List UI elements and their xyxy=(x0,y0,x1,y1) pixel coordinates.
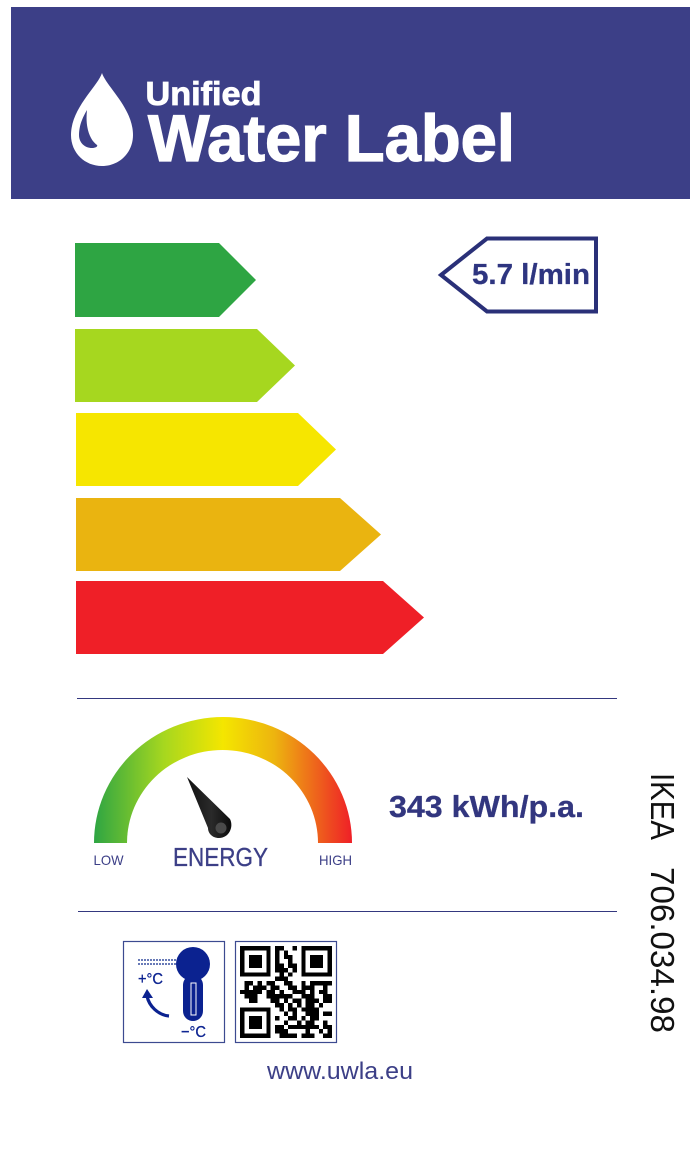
arrow: lime xyxy=(75,329,295,402)
icon: thermostat temperature: +°C xyxy=(138,971,163,988)
label: energy: ENERGY xyxy=(173,842,268,872)
arrow: green xyxy=(75,243,256,317)
icon: water drop xyxy=(71,73,133,166)
gauge arc xyxy=(94,717,352,843)
arrow: red xyxy=(76,581,424,654)
QR code xyxy=(236,942,336,1042)
energy consumption value: 343 kWh/p.a. xyxy=(389,789,584,824)
label: high: HIGH xyxy=(319,852,352,868)
website url: www.uwla.eu xyxy=(266,1058,413,1085)
icon: thermostat temperature: −°C xyxy=(181,1024,206,1041)
title: Unified: Unified xyxy=(146,75,262,112)
arrow: yellow xyxy=(76,413,336,486)
icon: thermostat temperature xyxy=(124,942,224,1042)
energy gauge xyxy=(94,717,352,872)
flow rate flag xyxy=(441,238,596,312)
header banner xyxy=(11,7,690,199)
gauge needle xyxy=(187,777,231,838)
arrow: amber xyxy=(76,498,381,571)
product identifier: 706.034.98 xyxy=(644,867,681,1033)
label: low: LOW xyxy=(94,852,124,868)
product identifier: IKEA xyxy=(644,773,681,840)
rating scale arrows xyxy=(75,243,424,654)
flow rate value: 5.7 l/min xyxy=(472,259,590,291)
product identifier xyxy=(644,773,681,1033)
title: Water Label: Water Label xyxy=(148,101,515,175)
